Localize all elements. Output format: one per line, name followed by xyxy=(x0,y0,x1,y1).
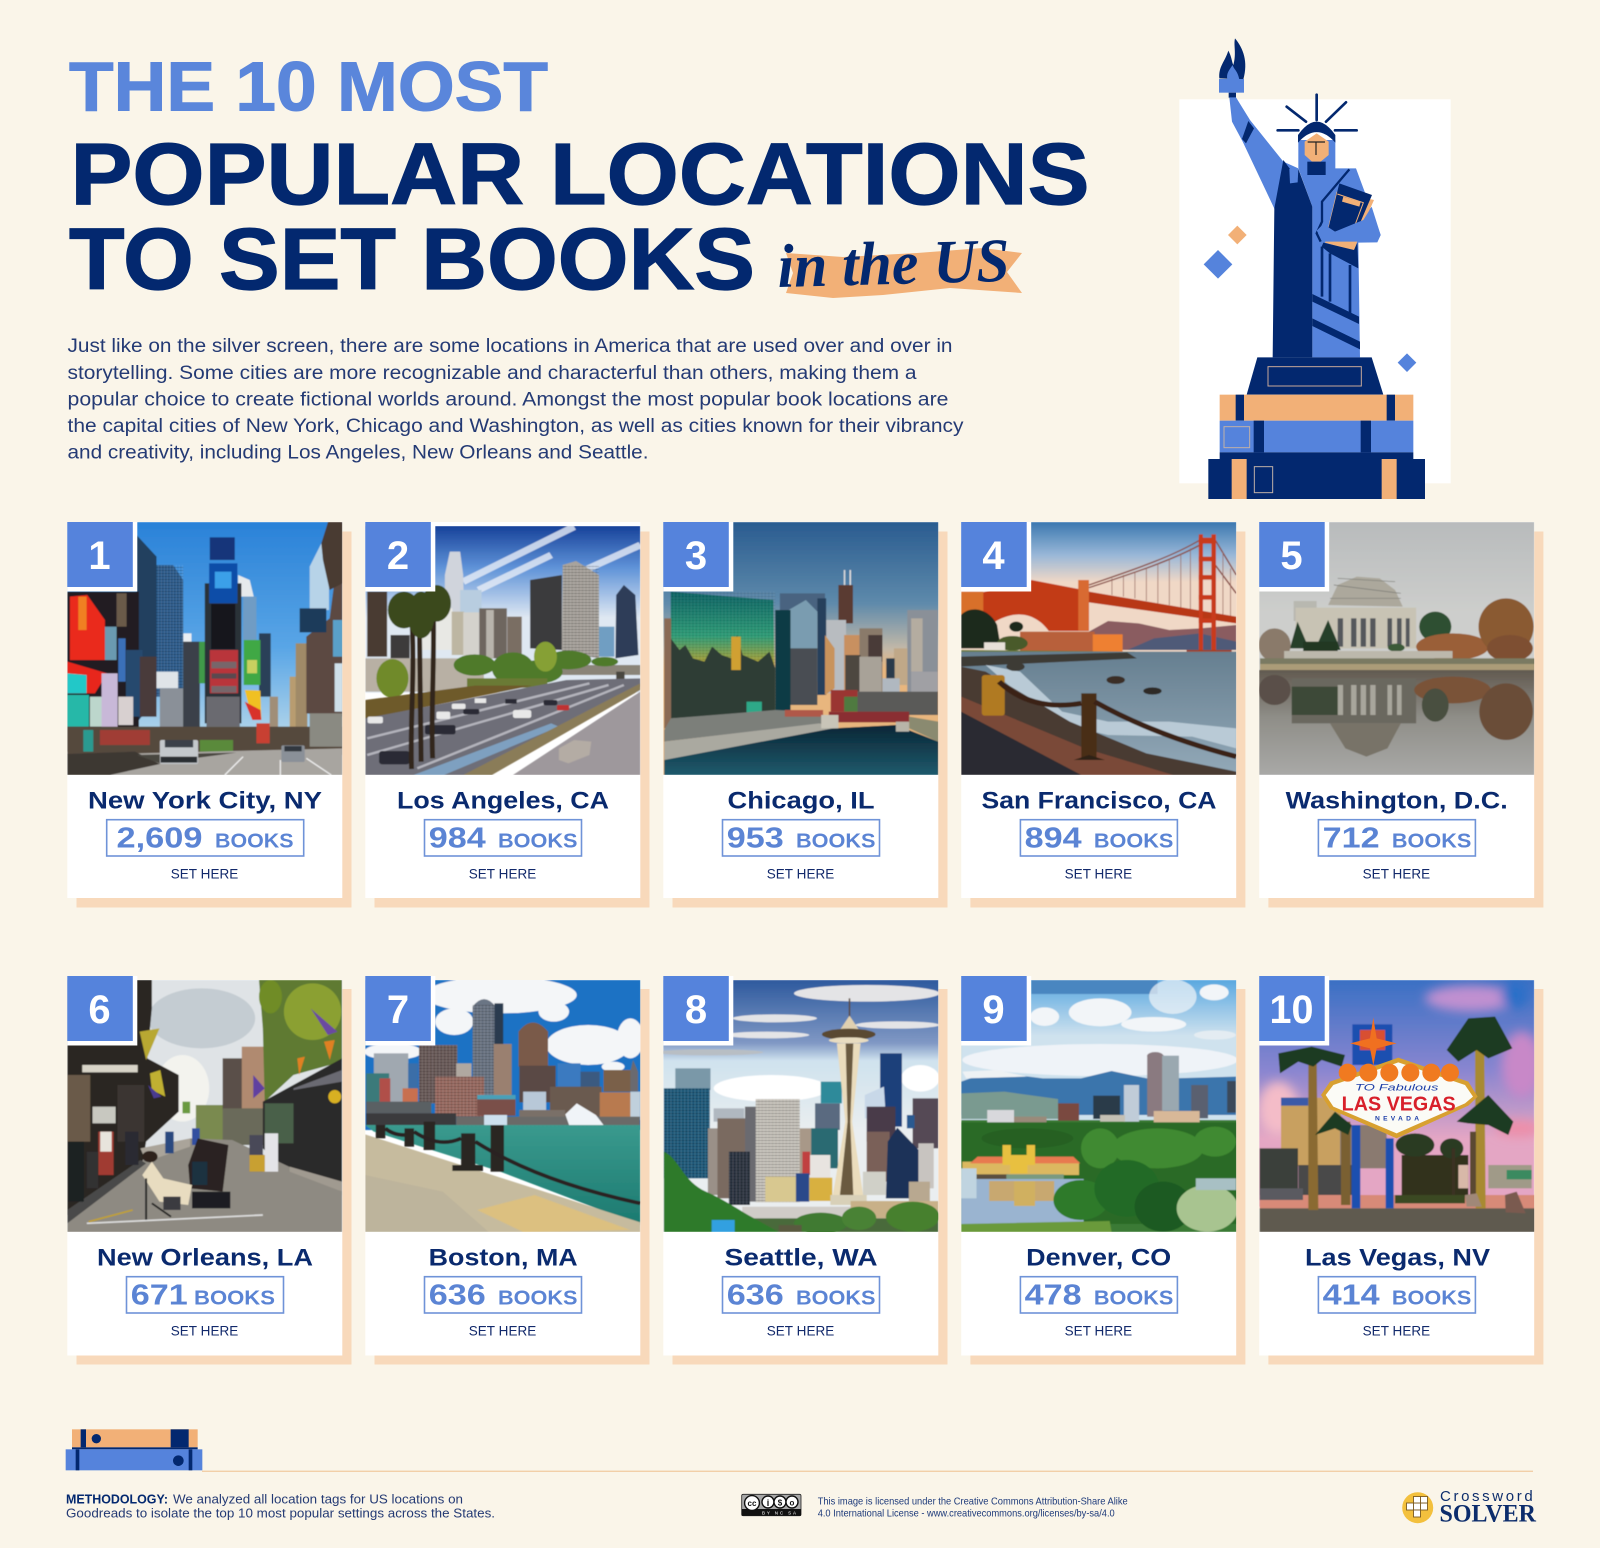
methodology note: METHODOLOGY: xyxy=(66,1491,168,1506)
book count: BOOKS xyxy=(1392,830,1471,852)
card 6: New Orleans xyxy=(67,976,352,1364)
card 1: New York City xyxy=(67,522,352,908)
rank badge 9: 9 xyxy=(982,988,1005,1032)
book count: BOOKS xyxy=(796,1287,876,1309)
city name: New Orleans, LA xyxy=(97,1244,313,1272)
title: THE 10 MOST xyxy=(69,48,548,126)
book count xyxy=(424,1277,582,1313)
methodology note: Goodreads to isolate the top 10 most popular settings across the States. xyxy=(66,1506,495,1521)
book count: 671 xyxy=(131,1279,188,1311)
book count: 478 xyxy=(1025,1279,1082,1311)
book count: 636 xyxy=(727,1279,784,1311)
set here label: SET HERE xyxy=(767,1323,834,1338)
Creative Commons badge: $ xyxy=(778,1498,783,1508)
book count: 636 xyxy=(429,1279,486,1311)
Creative Commons badge xyxy=(742,1494,801,1516)
rank badge 1: 1 xyxy=(88,534,111,578)
book count: 2,609 xyxy=(116,822,202,854)
book count xyxy=(722,1277,880,1313)
rank badge 5 xyxy=(1259,522,1329,592)
icon: stacked books footer xyxy=(66,1429,202,1470)
rank badge 9 xyxy=(961,976,1031,1046)
rank badge 7 xyxy=(365,976,435,1046)
book count xyxy=(1318,1277,1475,1313)
logo: Crossword Solver: SOLVER xyxy=(1440,1501,1537,1528)
intro paragraph: popular choice to create fictional worlds around. Amongst the most popular book locations are xyxy=(68,390,948,410)
intro paragraph: storytelling. Some cities are more recognizable and characterful than others, making them a xyxy=(68,363,917,384)
footer divider line xyxy=(202,1471,1533,1472)
title: TO SET BOOKS xyxy=(69,211,755,308)
book count: BOOKS xyxy=(1094,1287,1173,1309)
city name: Las Vegas, NV xyxy=(1305,1244,1491,1272)
book count: 414 xyxy=(1323,1279,1380,1311)
Creative Commons badge: BY NC SA xyxy=(762,1510,796,1516)
card 3: Chicago xyxy=(663,522,948,908)
rank badge 8: 8 xyxy=(685,988,707,1032)
logo: Crossword Solver: Crossword xyxy=(1440,1488,1533,1505)
city name: Boston, MA xyxy=(429,1244,578,1272)
rank badge 2 xyxy=(365,522,435,592)
rank badge 10: 10 xyxy=(1270,988,1314,1032)
photo: Welcome to Las Vegas sign: LAS VEGAS xyxy=(1342,1092,1456,1115)
book count xyxy=(1020,1277,1177,1313)
book count: BOOKS xyxy=(194,1287,275,1309)
title: POPULAR LOCATIONS xyxy=(70,126,1090,223)
rank badge 3: 3 xyxy=(685,534,707,578)
rank badge 8 xyxy=(663,976,733,1046)
methodology note: We analyzed all location tags for US locations on xyxy=(173,1491,463,1506)
intro paragraph: the capital cities of New York, Chicago and Washington, as well as cities known for their vibrancy xyxy=(68,416,964,437)
set here label: SET HERE xyxy=(1363,866,1430,881)
photo: Seattle Space Needle xyxy=(663,980,938,1232)
city name: Chicago, IL xyxy=(728,787,875,814)
book count: 953 xyxy=(727,822,784,854)
card 9: Denver xyxy=(961,976,1245,1364)
city name: San Francisco, CA xyxy=(982,787,1217,814)
set here label: SET HERE xyxy=(1065,866,1132,881)
rank badge 7: 7 xyxy=(387,988,409,1032)
script subtitle: in the US: in the US xyxy=(777,227,1010,301)
card 8: Seattle xyxy=(656,976,948,1364)
set here label: SET HERE xyxy=(1363,1323,1430,1338)
photo: Welcome to Las Vegas sign: NEVADA xyxy=(1375,1115,1419,1122)
logo: Crossword Solver xyxy=(1402,1488,1537,1528)
rank badge 6: 6 xyxy=(88,988,111,1032)
Creative Commons badge: o xyxy=(790,1498,795,1508)
rank badge 4 xyxy=(961,522,1031,592)
card 10: Las Vegas xyxy=(1258,976,1543,1364)
rank badge 2: 2 xyxy=(387,534,409,578)
book count: 712 xyxy=(1323,822,1380,854)
city name: Seattle, WA xyxy=(724,1244,878,1272)
set here label: SET HERE xyxy=(1065,1323,1132,1338)
set here label: SET HERE xyxy=(171,866,238,881)
card 7: Boston xyxy=(364,976,650,1364)
rank badge 5: 5 xyxy=(1280,534,1303,578)
book count xyxy=(1318,820,1475,856)
city name: New York City, NY xyxy=(88,787,322,814)
intro paragraph: Just like on the silver screen, there are some locations in America that are used over and over in xyxy=(68,336,953,357)
book count: 984 xyxy=(429,822,486,854)
title xyxy=(69,48,1090,308)
city name: Los Angeles, CA xyxy=(397,787,609,814)
city name: Washington, D.C. xyxy=(1286,787,1508,814)
set here label: SET HERE xyxy=(469,1323,536,1338)
license text xyxy=(818,1497,1128,1519)
book count xyxy=(424,820,582,856)
rank badge 6 xyxy=(67,976,137,1046)
photo: Welcome to Las Vegas sign: TO Fabulous xyxy=(1355,1082,1439,1092)
intro paragraph: and creativity, including Los Angeles, New Orleans and Seattle. xyxy=(68,442,648,464)
license text: 4.0 International License - www.creativecommons.org/licenses/by-sa/4.0 xyxy=(818,1508,1115,1519)
photo: Denver skyline and park xyxy=(961,980,1236,1232)
book count: BOOKS xyxy=(1094,830,1173,852)
Creative Commons badge: i xyxy=(767,1498,769,1508)
rank badge 3 xyxy=(663,522,733,592)
set here label: SET HERE xyxy=(171,1323,238,1338)
book count xyxy=(1020,820,1177,856)
book count xyxy=(107,820,304,856)
book count: BOOKS xyxy=(215,830,294,852)
photo: Welcome to Las Vegas sign xyxy=(1259,980,1534,1232)
book count xyxy=(126,1277,284,1313)
book count: BOOKS xyxy=(796,830,876,852)
photo: Golden Gate Bridge xyxy=(961,522,1236,775)
set here label: SET HERE xyxy=(469,866,536,881)
photo: Times Square xyxy=(67,522,342,775)
card 4: San Francisco xyxy=(961,522,1245,908)
Creative Commons badge: cc xyxy=(748,1499,757,1508)
intro paragraph xyxy=(68,336,964,464)
book count: BOOKS xyxy=(1392,1287,1471,1309)
rank badge 10 xyxy=(1259,976,1329,1046)
photo: French Quarter street xyxy=(67,980,342,1232)
book count: BOOKS xyxy=(498,1287,578,1309)
methodology note xyxy=(66,1491,495,1521)
illustration: Statue of Liberty on books xyxy=(1179,38,1451,499)
photo: Jefferson Memorial xyxy=(1259,522,1534,775)
rank badge 4: 4 xyxy=(982,534,1005,578)
photo: Boston harbor xyxy=(365,980,640,1232)
card 2: Los Angeles xyxy=(365,522,650,908)
book count: BOOKS xyxy=(498,830,578,852)
photo: Los Angeles freeway xyxy=(365,526,640,775)
photo: Chicago river xyxy=(663,522,938,775)
set here label: SET HERE xyxy=(767,866,834,881)
city name: Denver, CO xyxy=(1026,1244,1171,1272)
card 5: Washington xyxy=(1258,522,1543,908)
rank badge 1 xyxy=(67,522,137,592)
book count xyxy=(722,820,880,856)
license text: This image is licensed under the Creative Commons Attribution-Share Alike xyxy=(818,1497,1128,1508)
book count: 894 xyxy=(1025,822,1082,854)
